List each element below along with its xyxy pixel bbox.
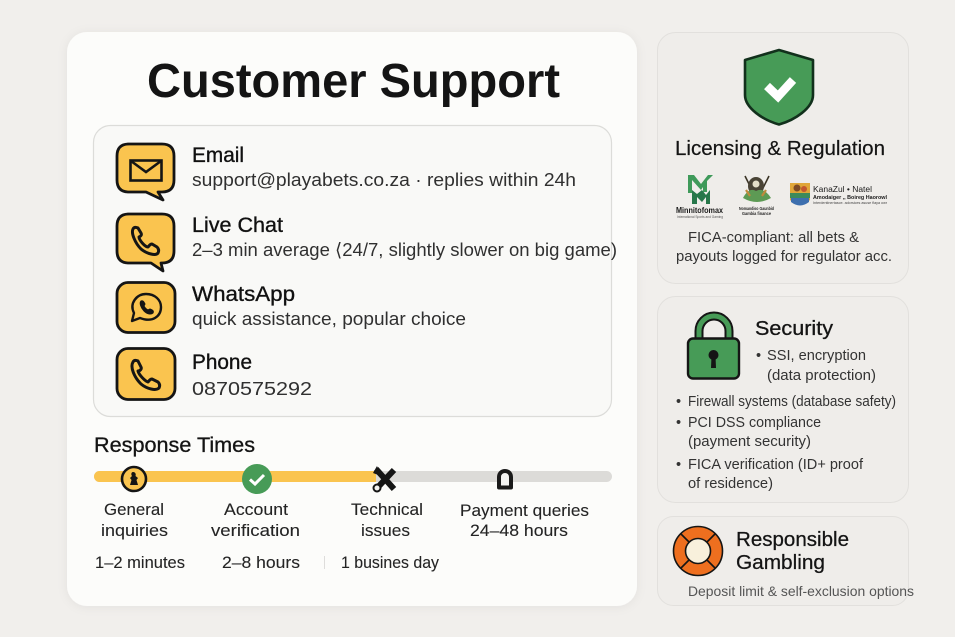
licensing text: FICA-compliant: all bets & (688, 230, 859, 246)
security list: FICA verification (ID+ proof (688, 457, 864, 473)
heading: licensing: Licensing & Regulation (675, 138, 885, 160)
icon: shield (745, 50, 813, 124)
heading: responsible gambling: Gambling (736, 551, 825, 574)
security list: of residence) (688, 476, 773, 492)
icon: general inquiries marker (122, 467, 146, 491)
security list: • (676, 394, 681, 410)
logo: ministry: Minnitofomax (676, 206, 723, 215)
icon: payment queries lock (499, 471, 511, 488)
logo: crest: Gambia finance (742, 211, 771, 216)
security list: • (676, 457, 681, 473)
logo: kwazulu-natal board: Amodaiger ,, Boireg Haorowl (813, 195, 887, 201)
stage: account verification: 2–8 hours (222, 554, 300, 572)
stage: technical issues: issues (361, 522, 410, 540)
security list: (data protection) (767, 368, 876, 384)
security list: Firewall systems (database safety) (688, 394, 896, 410)
icon: email (117, 144, 174, 200)
icon: technical issues tools (373, 466, 394, 492)
stage: account verification (211, 501, 300, 572)
icon: whatsapp (117, 282, 175, 332)
heading: responsible gambling (736, 528, 849, 574)
panel: customer support (67, 32, 637, 606)
phone text: Phone (192, 350, 252, 374)
logo: kwazulu-natal board (790, 183, 888, 206)
logo: ministry (676, 175, 723, 219)
whatsapp text (192, 282, 466, 329)
panel: contact channels (94, 126, 617, 416)
stage: general inquiries: 1–2 minutes (95, 554, 185, 572)
stage: general inquiries: General (104, 501, 164, 519)
heading: response times: Response Times (94, 434, 255, 457)
icon: live chat (117, 214, 174, 271)
security list: SSI, encryption (767, 348, 866, 364)
title: Customer Support (147, 55, 560, 108)
security list (676, 348, 896, 492)
stage: payment queries: 24–48 hours (470, 522, 568, 540)
security list: • (756, 348, 761, 364)
stage: technical issues (341, 501, 440, 572)
stage: general inquiries: inquiries (101, 522, 168, 540)
heading: responsible gambling: Responsible (736, 528, 849, 551)
phone text: 0870575292 (192, 378, 312, 399)
live chat text: Live Chat (192, 213, 283, 237)
icon: lifebuoy (674, 526, 722, 576)
whatsapp text: quick assistance, popular choice (192, 308, 466, 329)
email text (192, 143, 576, 190)
logo: ministry: Intemational Sports and Gaming (677, 214, 723, 219)
logo: kwazulu-natal board: Interdentinertasce. adorsices asuse flaya owr (813, 200, 888, 205)
stage: general inquiries (95, 501, 185, 572)
icon: padlock (688, 316, 739, 378)
security list: • (676, 415, 681, 431)
panel: responsible gambling (658, 516, 914, 606)
security list: PCI DSS compliance (688, 415, 821, 431)
timeline bar (94, 471, 612, 482)
logo: crest: Nomandiso Gaunbid (739, 206, 774, 211)
live chat text (192, 213, 617, 260)
logo: crest (739, 176, 774, 216)
icon: phone (117, 348, 175, 400)
logo: kwazulu-natal board: KanaZul • Natel (813, 185, 872, 194)
email text: Email (192, 143, 244, 167)
responsible gambling text: Deposit limit & self-exclusion options (688, 583, 914, 599)
stage: payment queries (460, 502, 589, 540)
live chat text: 2–3 min average ⟨24/7, slightly slower on big game) (192, 239, 617, 260)
licensing text: payouts logged for regulator acc. (676, 249, 892, 265)
panel: licensing and regulation (658, 32, 908, 284)
licensing text (676, 230, 892, 265)
stage: technical issues: 1 busines day (341, 554, 440, 572)
whatsapp text: WhatsApp (192, 282, 295, 306)
security list: (payment security) (688, 434, 811, 450)
heading: security: Security (755, 318, 833, 340)
stage: account verification: verification (211, 522, 300, 540)
stage: account verification: Account (224, 501, 288, 519)
email text: support@playabets.co.za · replies within 24h (192, 169, 576, 190)
phone text (192, 350, 312, 399)
panel: security (658, 296, 908, 502)
stage: payment queries: Payment queries (460, 502, 589, 520)
stage: technical issues: Technical (351, 501, 423, 519)
icon: account verification marker (242, 464, 272, 494)
